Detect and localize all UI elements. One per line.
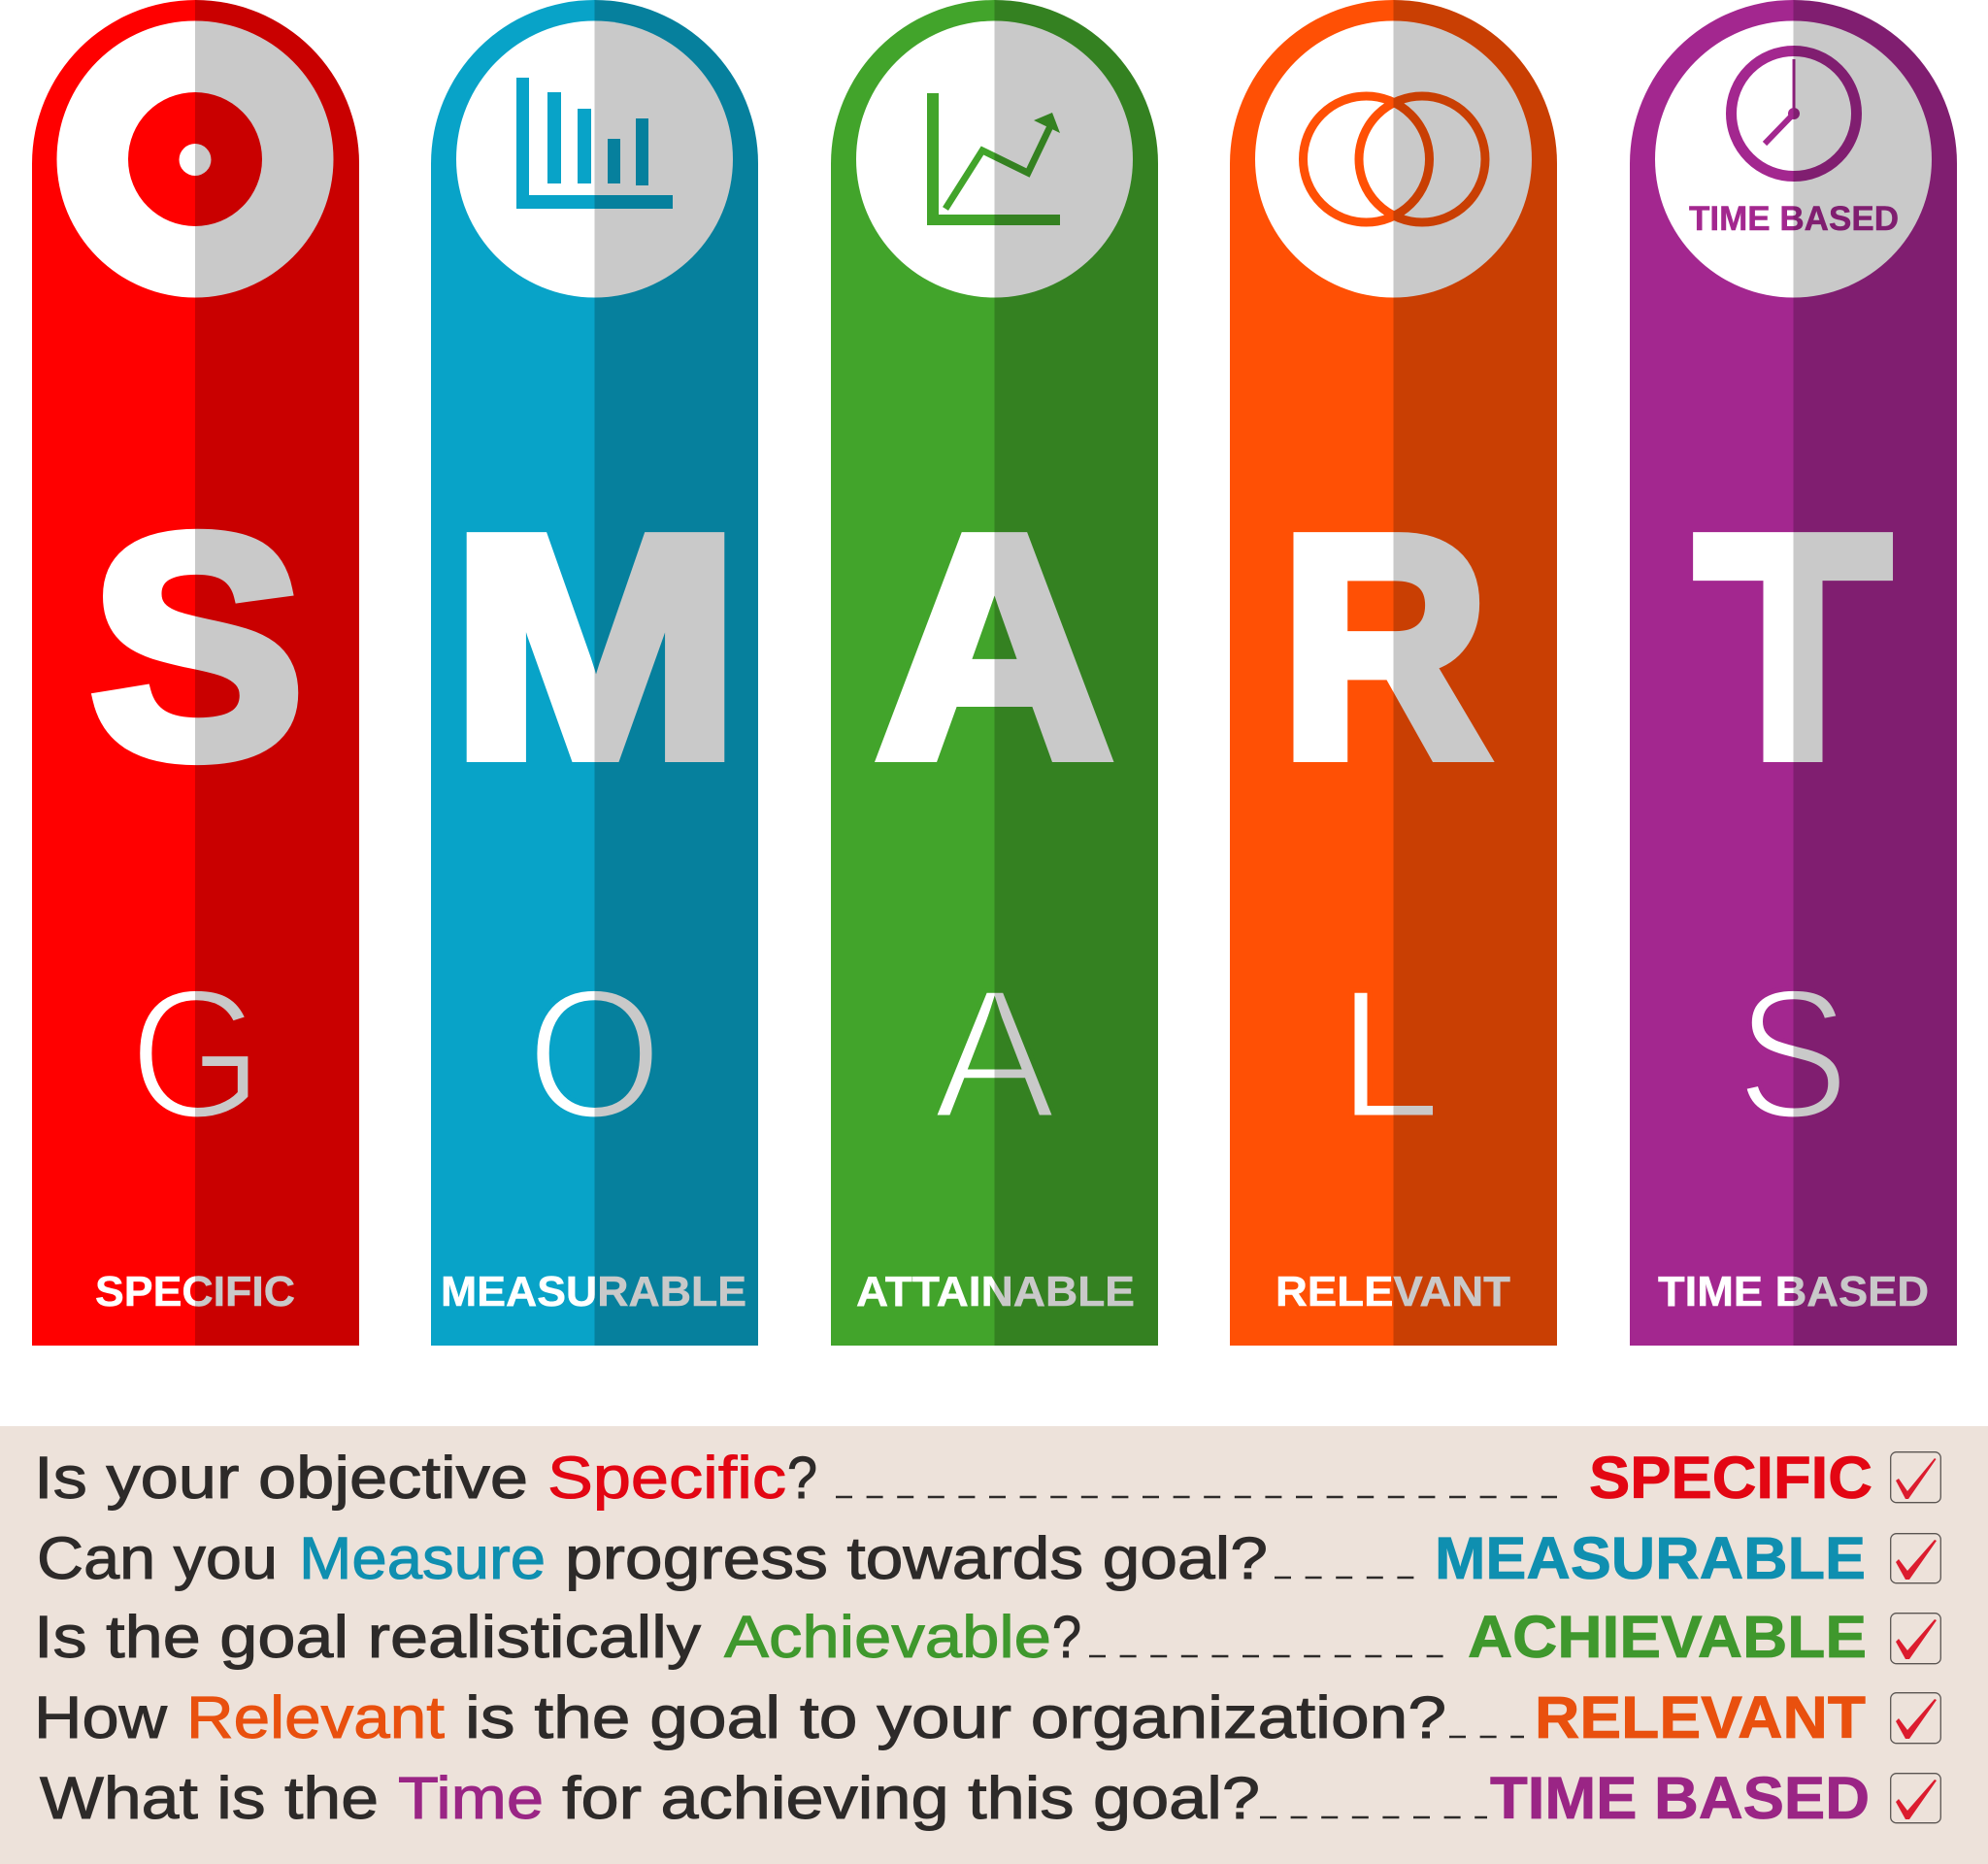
checkbox: [1891, 1774, 1940, 1823]
checklist background: [0, 1426, 1988, 1864]
checkbox: [1891, 1452, 1940, 1503]
checkbox: [1891, 1693, 1940, 1744]
question: relevant: is the goal to your organization?: [465, 1684, 1446, 1750]
icon: line chart with arrow: [927, 93, 1060, 225]
icon: circle background: [1255, 21, 1532, 297]
letter M: M: [450, 471, 740, 822]
row: measurable: [37, 1525, 1940, 1591]
answer: time based: TIME BASED: [1490, 1765, 1870, 1831]
letter T: T: [1697, 471, 1889, 822]
panel: measurable pillar: [431, 0, 758, 1346]
icon: clock: [1732, 50, 1856, 177]
pillar body: green: [831, 0, 1158, 1346]
label: time based: TIME BASED: [1658, 1268, 1929, 1315]
question: time: for achieving this goal?: [562, 1765, 1260, 1831]
question: achievable: Achievable: [724, 1604, 1051, 1670]
dashed leader: [1275, 1577, 1417, 1579]
answer: relevant: RELEVANT: [1535, 1684, 1866, 1750]
question: measure: progress towards goal?: [565, 1525, 1268, 1591]
answer: measurable: MEASURABLE: [1435, 1525, 1866, 1591]
dashed leader: [836, 1496, 1557, 1498]
right half shade: [594, 0, 758, 1346]
right half shade: [195, 0, 359, 1346]
question: time: What is the: [40, 1765, 379, 1831]
pillar body: orange: [1230, 0, 1557, 1346]
question: specific: Is your objective: [34, 1445, 528, 1511]
letter G: G: [129, 951, 263, 1157]
right half shade: [1394, 0, 1557, 1346]
checkbox: [1891, 1534, 1940, 1583]
letter A thin: A: [934, 951, 1056, 1157]
icon: circle background: [456, 21, 733, 297]
letter S thin: S: [1737, 951, 1849, 1157]
dashed leader: [1449, 1736, 1524, 1738]
icon caption: time based: TIME BASED: [1689, 200, 1899, 238]
pillar body: blue: [431, 0, 758, 1346]
row: achievable: [34, 1604, 1940, 1670]
row: relevant: [34, 1684, 1940, 1750]
letter R: R: [1280, 471, 1489, 822]
right half shade: [994, 0, 1158, 1346]
letter O: O: [526, 951, 662, 1157]
answer: specific: SPECIFIC: [1589, 1445, 1872, 1511]
letter L: L: [1337, 951, 1441, 1157]
panel: specific pillar: [32, 0, 359, 1346]
question: measure: Can you: [37, 1525, 278, 1591]
letter A: A: [877, 471, 1112, 822]
question: specific: ?: [787, 1445, 817, 1511]
label: measurable: MEASURABLE: [441, 1268, 746, 1315]
icon: bar chart: [516, 78, 673, 209]
panel: attainable pillar: [831, 0, 1158, 1346]
pillar body: red: [32, 0, 359, 1346]
icon: circle background: [1655, 21, 1932, 297]
icon: circle background: [856, 21, 1133, 297]
question: time: Time: [398, 1765, 544, 1831]
icon: target: [56, 21, 334, 297]
question: achievable: ?: [1052, 1604, 1081, 1670]
question: achievable: Is the goal realistically: [34, 1604, 702, 1670]
row: time based: [40, 1765, 1940, 1831]
answer: achievable: ACHIEVABLE: [1468, 1604, 1867, 1670]
label: attainable: ATTAINABLE: [856, 1268, 1135, 1315]
dashed leader: [1260, 1816, 1487, 1818]
right half shade: [1794, 0, 1957, 1346]
question: measure: Measure: [299, 1525, 546, 1591]
panel: time based pillar: [1630, 0, 1957, 1346]
row: specific: [34, 1445, 1940, 1511]
label: specific: SPECIFIC: [95, 1268, 295, 1315]
letter S: S: [90, 471, 304, 822]
question: specific: Specific: [547, 1445, 786, 1511]
checkbox: [1891, 1614, 1940, 1664]
label: relevant: RELEVANT: [1276, 1268, 1510, 1315]
dashed leader: [1089, 1655, 1444, 1657]
pillar body: purple: [1630, 0, 1957, 1346]
question: relevant: Relevant: [186, 1684, 445, 1750]
panel: checklist: [0, 1426, 1988, 1864]
question: relevant: How: [34, 1684, 168, 1750]
panel: relevant pillar: [1230, 0, 1557, 1346]
icon: overlapping rings: [1303, 96, 1485, 222]
